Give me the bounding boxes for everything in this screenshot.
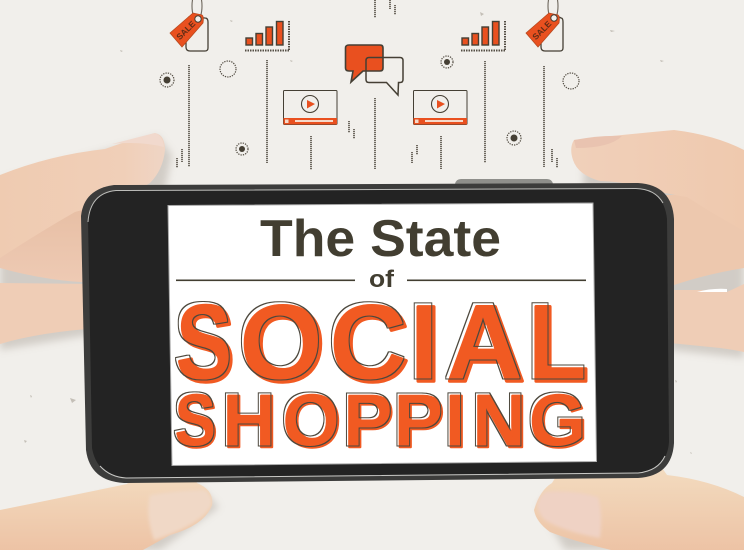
dotted vertical lines <box>177 0 557 170</box>
heading: of: of <box>369 266 395 293</box>
icon: speech bubbles <box>346 45 403 95</box>
dotted circle markers <box>160 56 579 155</box>
paper flecks <box>24 12 692 454</box>
heading: SOCIAL <box>174 280 589 404</box>
icon: sale tag left: SALE <box>174 19 198 42</box>
hand: left back fingers <box>0 195 100 344</box>
phone body <box>81 183 674 483</box>
heading: SOCIAL: S <box>177 283 235 404</box>
hand: right back fingers <box>640 195 744 352</box>
icon: sale tag right: SALE <box>530 19 554 42</box>
icon: sale tag left <box>170 0 208 51</box>
phone button <box>455 179 553 184</box>
heading: SOCIAL: L <box>530 283 589 404</box>
heading: SOCIAL: S <box>174 280 232 401</box>
rule left <box>176 280 355 281</box>
heading: SHOPPING: HOPPING <box>222 378 586 461</box>
icon: bar chart right <box>461 21 506 50</box>
hand shadows <box>0 136 744 550</box>
heading: SOCIAL: OCIA <box>241 283 525 404</box>
icon: video player right <box>414 90 467 124</box>
hand: right upper finger <box>571 130 744 231</box>
heading: SHOPPING: S <box>176 380 217 463</box>
heading: The State: The State <box>260 210 501 268</box>
hand: left thumb <box>0 470 212 550</box>
rule right <box>407 280 586 281</box>
phone screen <box>168 203 596 466</box>
heading: SOCIAL: OCIA <box>238 280 522 401</box>
icon: sale tag right <box>526 0 563 51</box>
hand: right thumb <box>534 465 744 550</box>
heading: SHOPPING: S <box>174 378 215 461</box>
hand: left upper finger <box>0 133 165 258</box>
heading: SHOPPING: HOPPING <box>224 380 588 463</box>
heading: SOCIAL: L <box>526 280 586 401</box>
icon: video player left <box>284 90 337 124</box>
icon: bar chart left <box>245 21 290 50</box>
